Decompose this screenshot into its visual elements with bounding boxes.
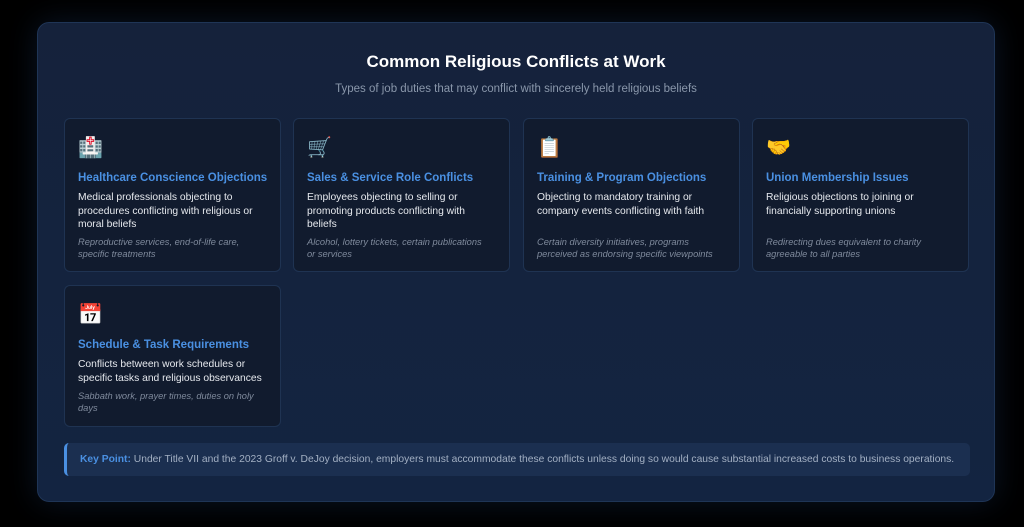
heading: Schedule & Task Requirements	[78, 339, 249, 351]
description: Conflicts between work schedules or specific tasks and religious observances	[78, 359, 262, 384]
icon: clipboard: 📋	[537, 137, 562, 159]
heading: Training & Program Objections	[537, 172, 706, 184]
icon: calendar: 📅	[78, 304, 103, 326]
callout: key point: Key Point: Under Title VII and the 2023 Groff v. DeJoy decision, employers must accommodate these conflicts unless doing so would cause substantial increased costs to business operations.	[80, 454, 954, 465]
examples: Alcohol, lottery tickets, certain publications or services	[307, 237, 482, 258]
examples: Sabbath work, prayer times, duties on holy days	[78, 391, 254, 412]
card: union	[752, 118, 969, 272]
description: Objecting to mandatory training or company events conflicting with faith	[537, 192, 704, 216]
description: Medical professionals objecting to procedures conflicting with religious or moral beliefs	[78, 192, 253, 230]
heading: Sales & Service Role Conflicts	[307, 172, 473, 184]
card: sales	[293, 118, 510, 272]
card: training	[523, 118, 740, 272]
description: Religious objections to joining or financially supporting unions	[766, 192, 914, 216]
examples: Redirecting dues equivalent to charity agreeable to all parties	[766, 237, 921, 258]
subtitle: Types of job duties that may conflict with sincerely held religious beliefs	[335, 83, 697, 95]
icon: handshake: 🤝	[766, 137, 791, 159]
examples: Certain diversity initiatives, programs perceived as endorsing specific viewpoints	[537, 237, 713, 258]
examples: Reproductive services, end-of-life care, specific treatments	[78, 237, 239, 258]
icon: hospital: 🏥	[78, 137, 103, 159]
card: schedule	[64, 285, 281, 427]
icon: cart: 🛒	[307, 137, 332, 159]
title: Common Religious Conflicts at Work	[366, 52, 666, 71]
heading: Healthcare Conscience Objections	[78, 172, 267, 184]
description: Employees objecting to selling or promoting products conflicting with beliefs	[307, 192, 465, 230]
callout: key point	[64, 443, 970, 476]
heading: Union Membership Issues	[766, 172, 909, 184]
card: healthcare	[64, 118, 281, 272]
